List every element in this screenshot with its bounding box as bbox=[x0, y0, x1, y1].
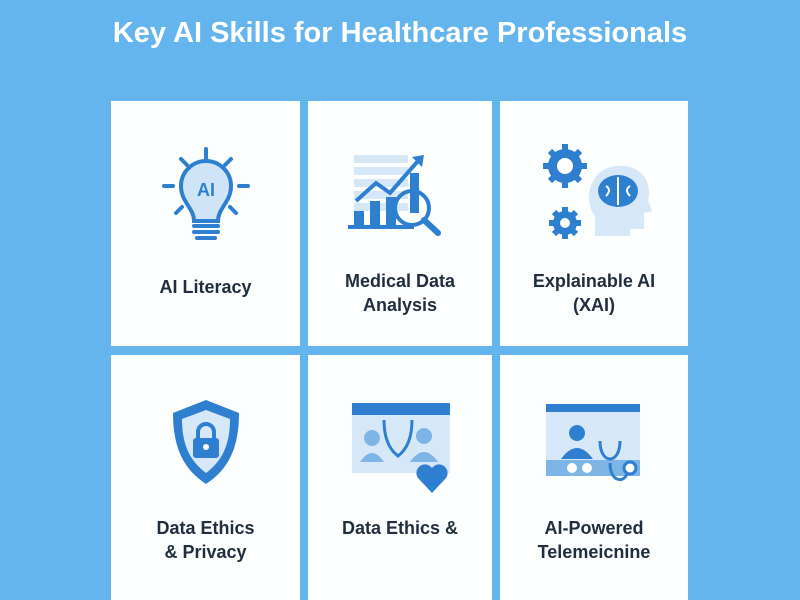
label: AI Literacy bbox=[159, 277, 252, 297]
label: Data Ethics & bbox=[342, 518, 458, 538]
panel: AI literacy bbox=[111, 101, 300, 346]
label: Data Ethics bbox=[156, 518, 255, 538]
label bbox=[156, 518, 255, 562]
title: Key AI Skills for Healthcare Professionals bbox=[113, 17, 687, 49]
icon: shield with lock bbox=[173, 400, 239, 484]
label: (XAI) bbox=[573, 295, 615, 315]
panel: explainable AI bbox=[500, 101, 688, 346]
label: Analysis bbox=[363, 295, 437, 315]
label: Telemeicnine bbox=[538, 542, 650, 562]
label: Medical Data bbox=[345, 271, 455, 291]
icon: video call with doctor bbox=[546, 404, 640, 482]
panel: data ethics bbox=[308, 355, 492, 600]
label: & Privacy bbox=[164, 542, 247, 562]
icon: screen with people and heart bbox=[352, 403, 450, 493]
icon: lightbulb: AI bbox=[197, 180, 215, 200]
panel: medical data analysis bbox=[308, 101, 492, 346]
icon: chart with magnifier bbox=[348, 155, 441, 236]
label: AI-Powered bbox=[544, 518, 644, 538]
label bbox=[538, 518, 650, 562]
label bbox=[345, 271, 456, 315]
icon: gears and brain bbox=[543, 144, 652, 239]
label bbox=[533, 271, 655, 315]
panel: AI-powered telemedicine bbox=[500, 355, 688, 600]
label: Explainable AI bbox=[533, 271, 655, 291]
panel: data ethics & privacy bbox=[111, 355, 300, 600]
icon: lightbulb bbox=[162, 147, 250, 240]
